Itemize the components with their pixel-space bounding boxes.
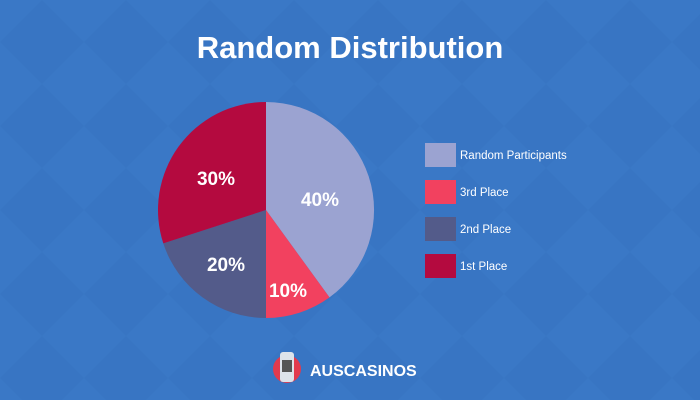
pie chart: 40% bbox=[301, 190, 339, 211]
legend: 1st Place bbox=[460, 261, 507, 273]
pie chart: 10% bbox=[269, 281, 307, 302]
legend: 3rd Place bbox=[460, 187, 509, 199]
pie chart: 30% bbox=[197, 169, 235, 190]
pie chart: 20% bbox=[207, 255, 245, 276]
legend: Random Participants bbox=[460, 150, 567, 162]
logo: AUSCASINOS bbox=[310, 363, 417, 380]
title: Random Distribution bbox=[197, 30, 503, 65]
legend: 2nd Place bbox=[460, 224, 511, 236]
